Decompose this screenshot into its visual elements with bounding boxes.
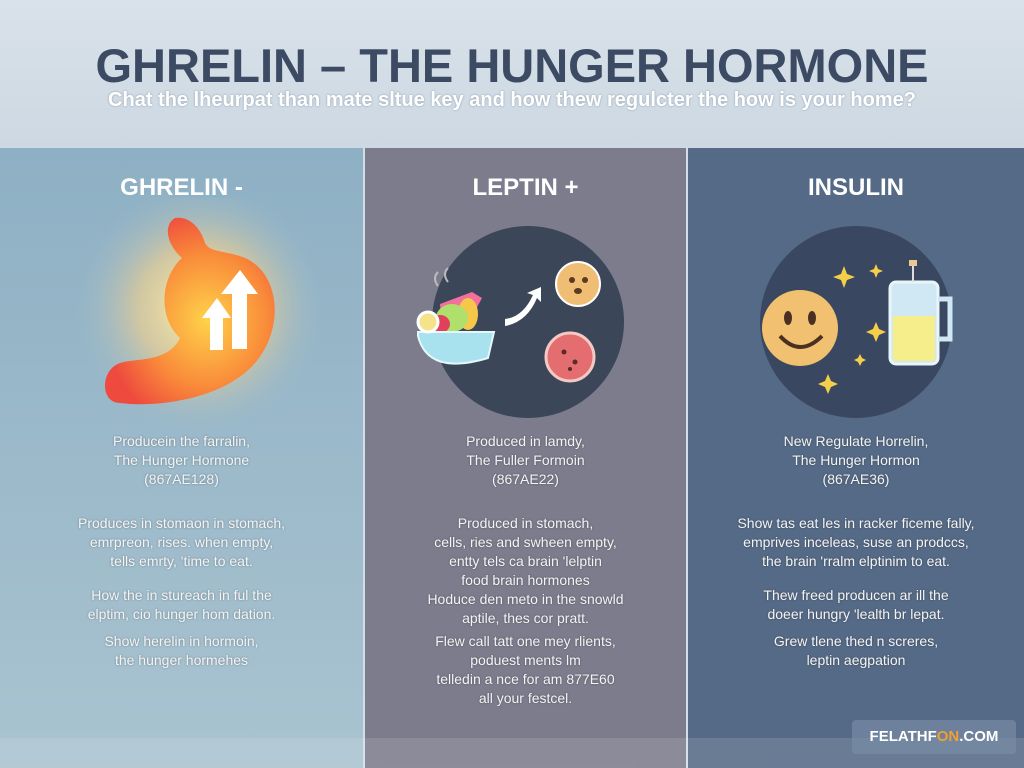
- icon: food bowl to fat cell: [416, 226, 624, 418]
- text: ghrelin title: [113, 433, 250, 488]
- text: leptin footer: telledin a nce for am 877E60: [436, 671, 615, 687]
- text: ghrelin body: Produces in stomaon in stomach,: [78, 515, 285, 531]
- title: GHRELIN – THE HUNGER HORMONE: [96, 39, 928, 92]
- text: leptin body: [427, 515, 624, 626]
- icon: smiley and glass: [760, 226, 952, 418]
- panel: leptin: [365, 148, 686, 768]
- text: leptin body: food brain hormones: [461, 572, 590, 588]
- text: insulin body: emprives inceleas, suse an prodccs,: [743, 534, 969, 550]
- text: leptin title: [466, 433, 585, 487]
- text: leptin title: Produced in lamdy,: [466, 433, 585, 449]
- text: insulin footer: leptin aegpation: [807, 652, 905, 668]
- text: leptin footer: poduest ments lm: [470, 652, 581, 668]
- text: leptin footer: Flew call tatt one mey rlients,: [435, 633, 616, 649]
- text: insulin note: [763, 587, 949, 622]
- panel: ghrelin: [0, 148, 363, 768]
- text: insulin title: [784, 433, 928, 487]
- subtitle: Chat the lheurpat than mate sltue key and how thew regulcter the how is your home?: [108, 89, 916, 111]
- text: ghrelin note: How the in stureach in ful the: [91, 587, 272, 603]
- heading: leptin: LEPTIN +: [472, 174, 579, 201]
- text: leptin footer: all your festcel.: [479, 690, 572, 706]
- text: leptin title: The Fuller Formoin: [466, 452, 585, 468]
- text: leptin body: Hoduce den meto in the snowld: [427, 591, 624, 607]
- text: leptin title: (867AE22): [492, 471, 559, 487]
- logo: FELATHFON.COM: [870, 728, 998, 745]
- icon: stomach with arrows: [96, 203, 304, 410]
- text: insulin body: Show tas eat les in racker ficeme fally,: [737, 515, 975, 531]
- text: insulin note: Thew freed producen ar ill the: [763, 587, 949, 603]
- text: leptin footer: [435, 633, 616, 706]
- text: insulin body: the brain 'rralm elptinim to eat.: [762, 553, 950, 569]
- text: ghrelin body: [78, 515, 285, 570]
- text: ghrelin note: [87, 587, 275, 623]
- text: ghrelin footer: Show herelin in hormoin,: [104, 633, 259, 649]
- text: insulin footer: [774, 633, 938, 668]
- text: leptin body: entty tels ca brain 'lelptin: [449, 553, 602, 569]
- text: insulin note: doeer hungry 'lealth br lepat.: [767, 606, 944, 622]
- text: insulin title: (867AE36): [823, 471, 889, 487]
- text: ghrelin title: Producein the farralin,: [113, 433, 250, 449]
- heading: ghrelin: GHRELIN -: [120, 174, 243, 201]
- text: leptin body: Produced in stomach,: [458, 515, 593, 531]
- text: ghrelin body: tells emrty, 'time to eat.: [110, 553, 253, 569]
- text: insulin title: The Hunger Hormon: [792, 452, 920, 468]
- bottom strip: [0, 738, 1024, 768]
- text: ghrelin title: The Hunger Hormone: [114, 452, 249, 468]
- text: leptin body: aptile, thes cor pratt.: [462, 610, 589, 626]
- logo: [852, 720, 1016, 754]
- text: ghrelin title: (867AE128): [144, 471, 219, 487]
- text: insulin footer: Grew tlene thed n screres,: [774, 633, 938, 649]
- panel: insulin: [688, 148, 1024, 768]
- text: leptin body: cells, ries and swheen empty,: [434, 534, 617, 550]
- heading: insulin: INSULIN: [808, 174, 904, 201]
- text: insulin title: New Regulate Horrelin,: [784, 433, 928, 449]
- text: ghrelin body: emrpreon, rises. when empty,: [90, 534, 273, 550]
- header: [0, 0, 1024, 148]
- text: insulin body: [737, 515, 975, 569]
- text: ghrelin footer: the hunger hormehes: [115, 652, 248, 668]
- text: ghrelin footer: [104, 633, 259, 669]
- text: ghrelin note: elptim, cio hunger hom dation.: [88, 606, 275, 622]
